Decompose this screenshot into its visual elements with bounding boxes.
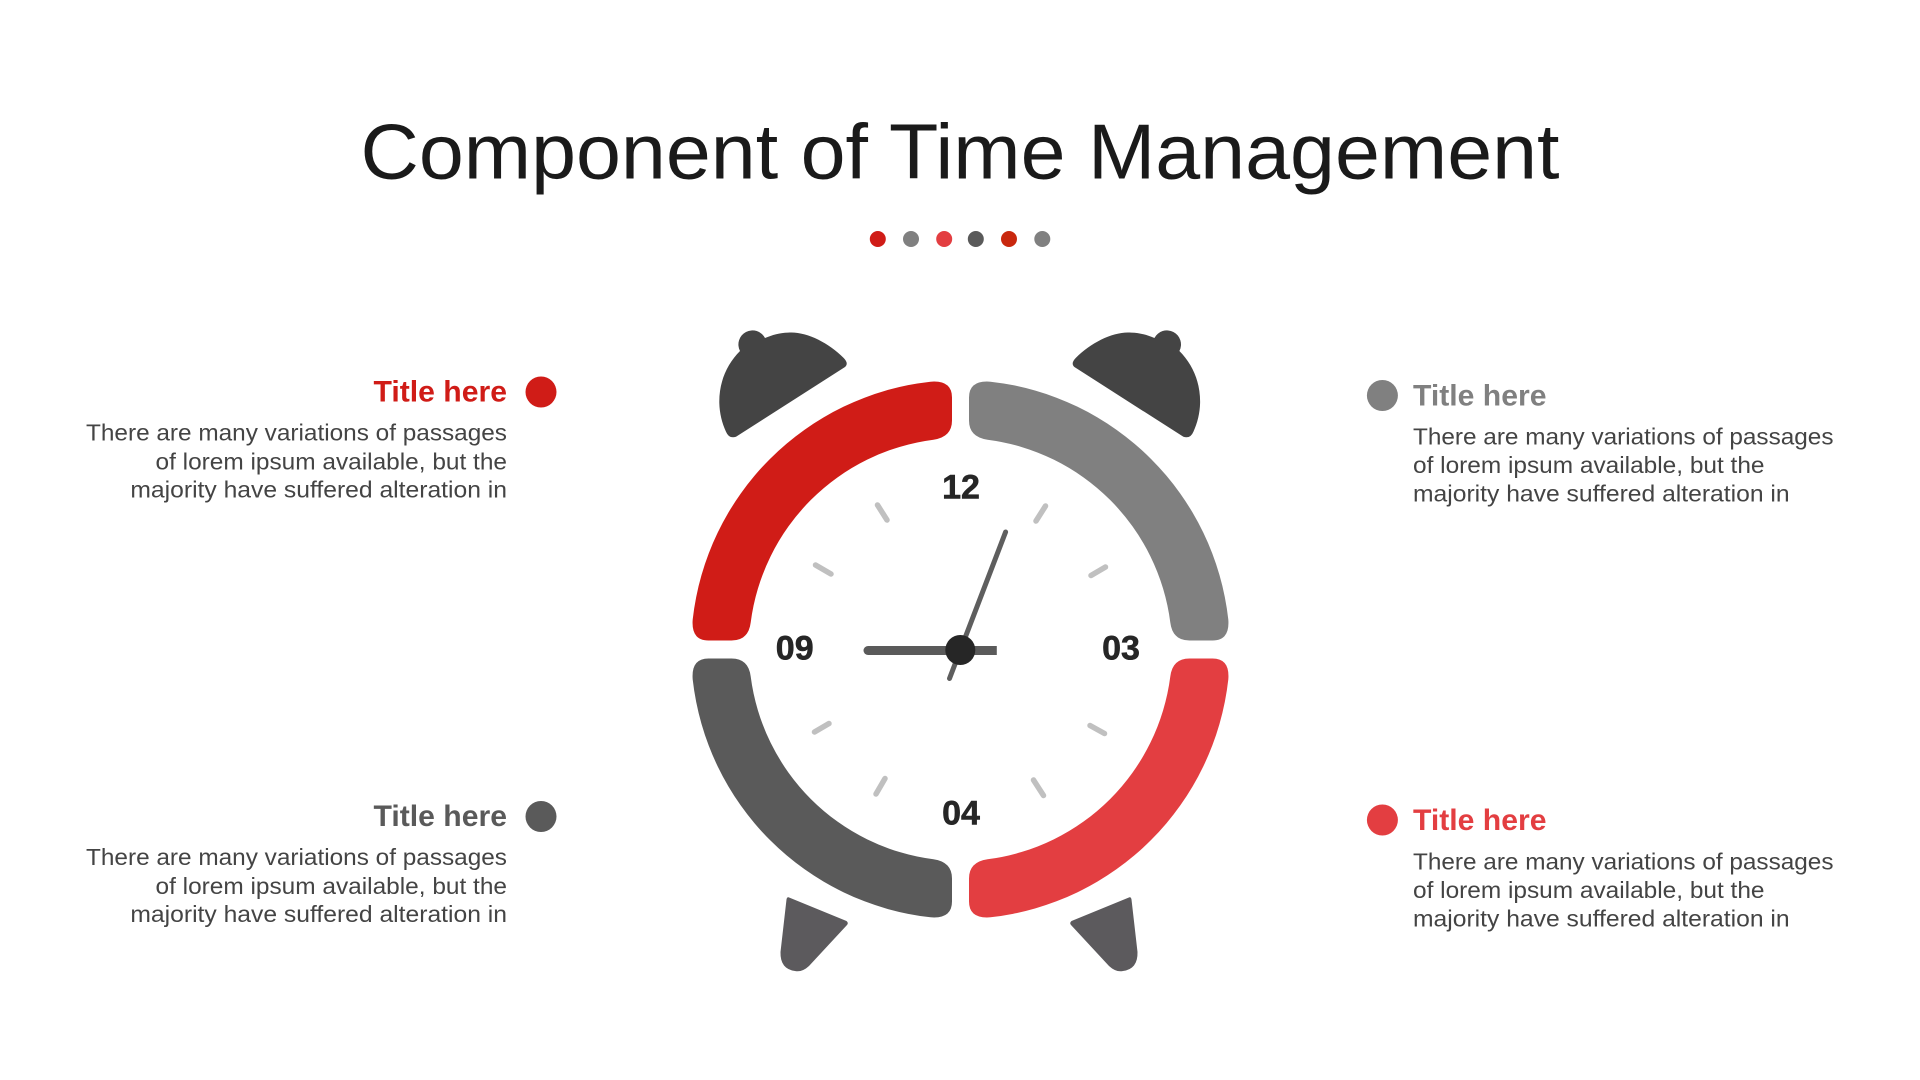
text block: bottom-left: There are many variations of passages	[86, 844, 507, 870]
title: Component of Time Management	[360, 108, 1560, 196]
text block: top-right	[1413, 424, 1834, 507]
hour hand	[864, 646, 997, 655]
panel: top-right item	[1367, 379, 1834, 507]
ring segment: dark bottom-left	[693, 658, 952, 917]
clock numbers: 04	[942, 794, 980, 832]
heading: bottom-left: Title here	[374, 800, 507, 833]
text block: top-left: of lorem ipsum available, but the	[156, 448, 507, 474]
clock center pin	[945, 635, 975, 665]
panel: bottom-right item	[1367, 804, 1834, 932]
text block: bottom-left: majority have suffered alteration in	[130, 901, 507, 927]
text block: top-left: majority have suffered alteration in	[130, 477, 507, 503]
icon: right bell	[1073, 330, 1200, 437]
ring segment: gray top-right	[969, 382, 1228, 640]
clock ticks	[814, 505, 1106, 796]
text block: top-right: of lorem ipsum available, but the	[1413, 452, 1764, 478]
chart: alarm clock	[693, 330, 1228, 971]
minute hand	[950, 532, 1006, 678]
clock numbers: 03	[1102, 630, 1140, 668]
dot: top-left	[526, 376, 556, 408]
ring segment: red top-left	[693, 382, 952, 640]
title dots	[870, 231, 1050, 247]
text block: bottom-left	[86, 844, 507, 927]
text block: top-left	[86, 420, 507, 503]
dot: bottom-left	[526, 801, 556, 832]
icon: left bell	[719, 330, 847, 437]
icon: left foot	[780, 897, 848, 971]
text block: top-right: majority have suffered alteration in	[1413, 481, 1790, 507]
heading: top-right: Title here	[1413, 379, 1546, 412]
text block: bottom-right: majority have suffered alteration in	[1413, 906, 1790, 932]
text block: bottom-left: of lorem ipsum available, but the	[156, 873, 507, 899]
ring segment: light red bottom-right	[969, 658, 1228, 917]
icon: right foot	[1070, 897, 1138, 971]
text block: bottom-right: of lorem ipsum available, but the	[1413, 877, 1764, 903]
text block: bottom-right	[1413, 849, 1834, 932]
panel: top-left item	[86, 376, 556, 503]
clock numbers: 09	[776, 630, 814, 668]
heading: top-left: Title here	[374, 376, 507, 409]
clock numbers	[776, 468, 1140, 832]
dot: top-right	[1367, 380, 1398, 411]
dot: bottom-right	[1367, 804, 1398, 836]
heading: bottom-right: Title here	[1413, 804, 1546, 837]
text block: top-left: There are many variations of passages	[86, 420, 507, 446]
panel: bottom-left item	[86, 800, 556, 927]
text block: bottom-right: There are many variations of passages	[1413, 849, 1834, 875]
text block: top-right: There are many variations of passages	[1413, 424, 1834, 450]
clock numbers: 12	[942, 468, 980, 506]
